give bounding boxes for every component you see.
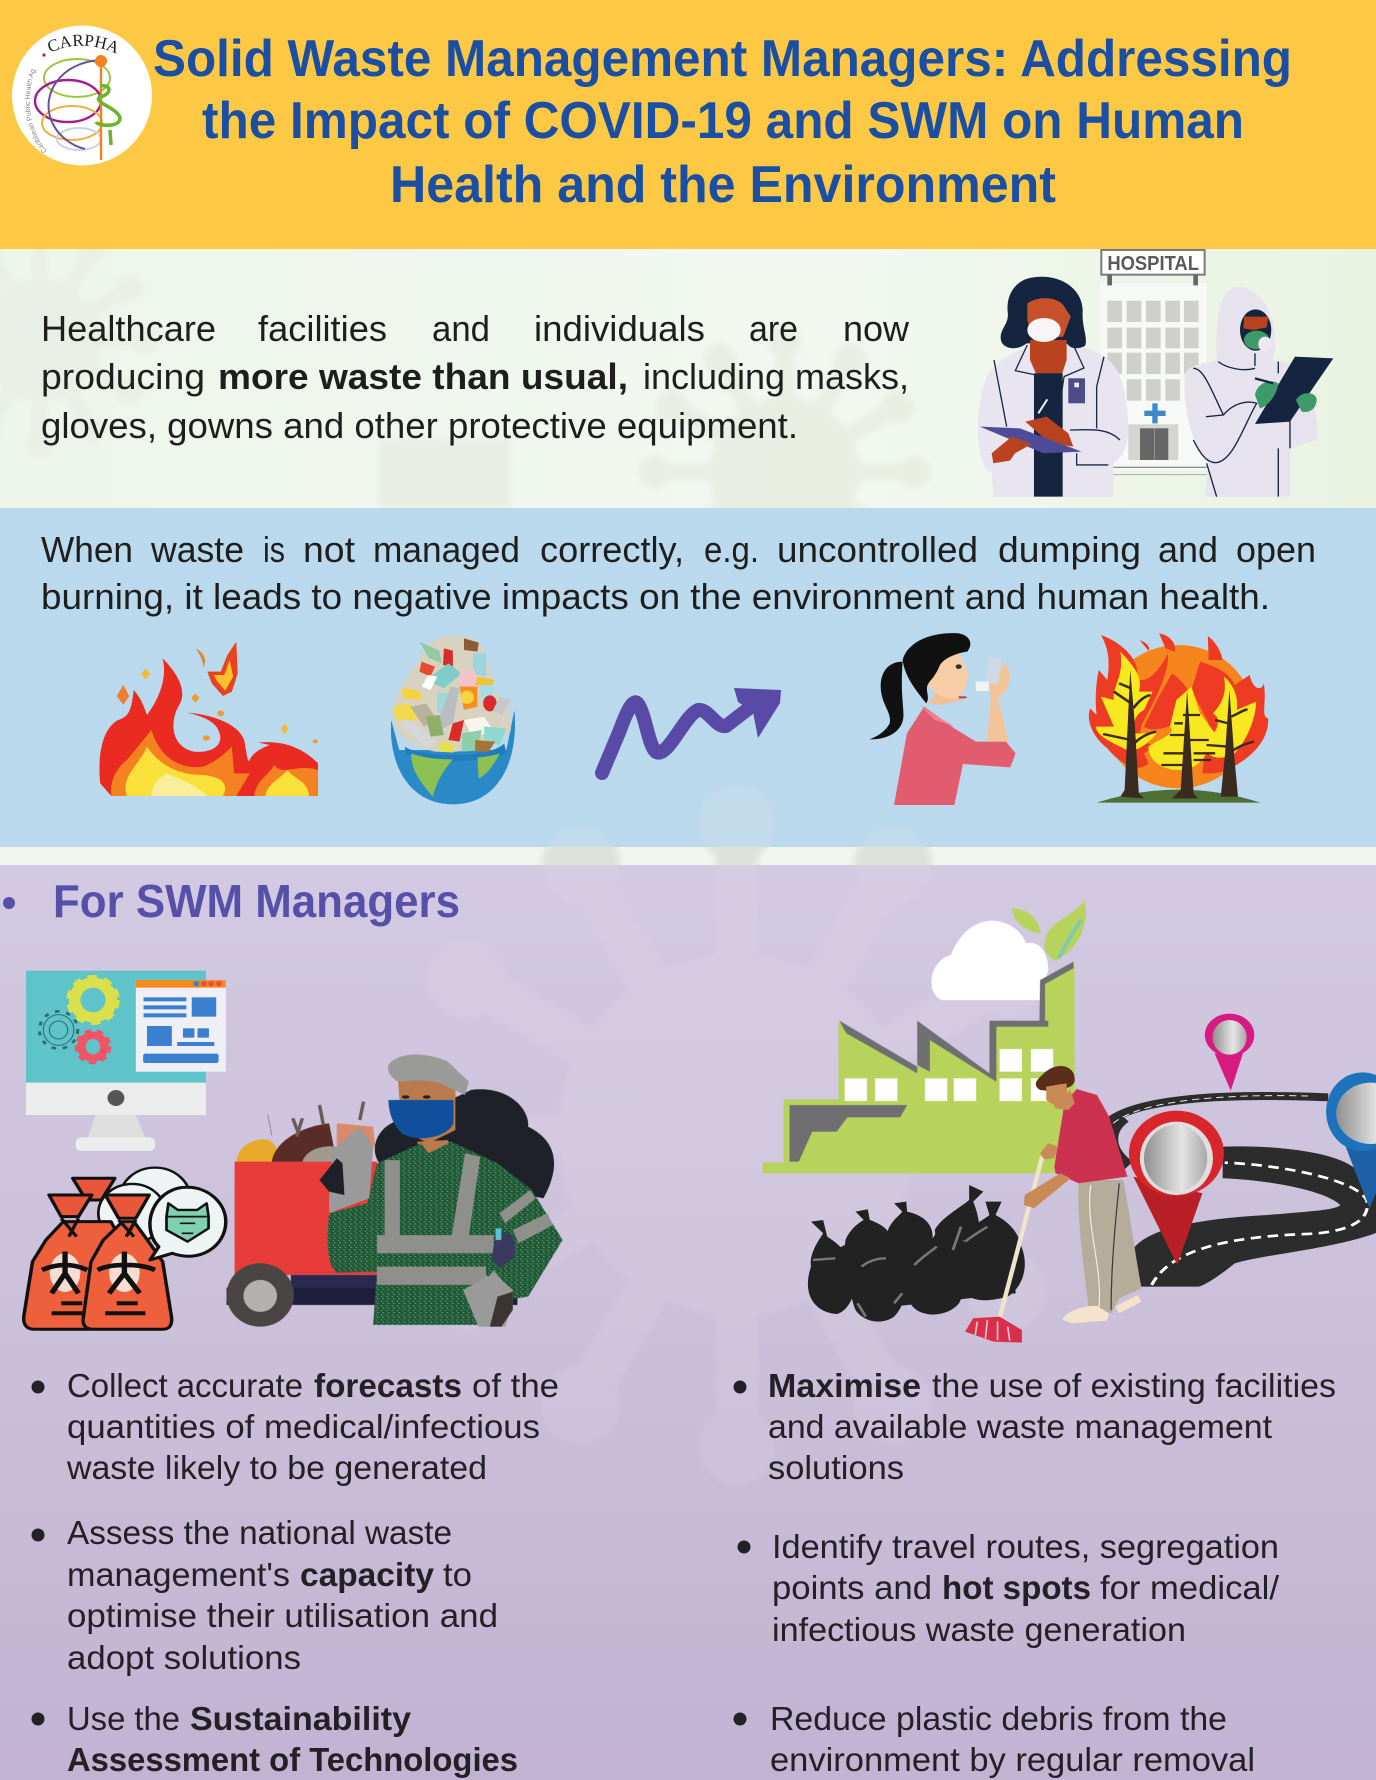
arrow: rising trend — [602, 688, 781, 773]
text: impacts paragraph: managed — [373, 529, 520, 570]
text: right action list: solutions — [768, 1449, 904, 1486]
doctor — [978, 277, 1128, 497]
text: left action list: capacity — [300, 1556, 435, 1593]
hospital building — [1100, 250, 1207, 475]
text: right action list: for medical/ — [1100, 1569, 1280, 1606]
text: left action list: adopt solutions — [67, 1639, 301, 1676]
text: impacts paragraph: open — [1236, 529, 1316, 570]
text: right action list: points and — [772, 1569, 932, 1606]
title: Solid Waste Management Managers: Addressing — [153, 30, 1292, 88]
text: intro paragraph: individuals — [534, 308, 705, 349]
panel: healthcare waste intro — [0, 249, 1376, 508]
icon: open burning flames — [99, 642, 318, 796]
icon: computer monitor with gears and dashboard — [26, 971, 226, 1151]
text: impacts paragraph: and — [1158, 529, 1218, 570]
text: left action list: forecasts — [314, 1367, 462, 1404]
text: impacts paragraph — [41, 529, 1316, 617]
icon: sweeper with black garbage bags — [808, 1066, 1142, 1343]
text: intro paragraph: facilities — [258, 308, 387, 349]
text: left action list: Sustainability — [190, 1700, 412, 1737]
text: impacts paragraph: is — [263, 529, 285, 570]
protective-suit worker — [1184, 287, 1333, 497]
text: intro paragraph: and — [432, 308, 490, 349]
icon: person using inhaler — [869, 633, 1016, 805]
text: impacts paragraph: dumping — [998, 529, 1141, 570]
heading: for SWM managers: For SWM Managers — [53, 875, 460, 927]
text: left action list: optimise their utilisation and — [67, 1597, 498, 1634]
text: intro paragraph: producing — [41, 356, 205, 397]
panel: impacts of poor waste management — [0, 508, 1376, 847]
text: intro paragraph: including masks, — [643, 356, 909, 397]
text: intro paragraph: more waste than usual, — [218, 356, 628, 397]
text: right action list: infectious waste generation — [772, 1611, 1186, 1648]
text: intro paragraph: now — [843, 308, 910, 349]
text: left action list: Assess the national waste — [67, 1514, 452, 1551]
pin: magenta — [1205, 1014, 1254, 1091]
text: right action list: Maximise — [768, 1367, 921, 1404]
icon: winding road with location pins — [1110, 1014, 1376, 1287]
sweeper — [965, 1066, 1142, 1343]
worker figure — [320, 1055, 563, 1327]
text: left action list — [32, 1367, 559, 1778]
panel: title banner — [0, 0, 1376, 249]
text: intro paragraph — [41, 308, 910, 446]
text: impacts paragraph: waste — [150, 529, 244, 570]
panel: pale divider band — [0, 847, 1376, 865]
icon: recycling factory with leaves and cloud — [762, 901, 1086, 1173]
text: impacts paragraph: uncontrolled — [777, 529, 978, 570]
icon: waste worker with collection cart — [227, 1055, 563, 1327]
garbage bags — [808, 1185, 1025, 1322]
text: impacts paragraph: When — [41, 529, 133, 570]
text: right action list: and available waste management — [768, 1408, 1272, 1445]
text: left action list: waste likely to be generated — [66, 1449, 487, 1486]
text: impacts paragraph: burning, it leads to negative impacts on the environment and human health. — [41, 576, 1270, 617]
text: right action list: Identify travel routes, segregation — [772, 1528, 1279, 1565]
cart with waste — [227, 1102, 517, 1327]
text: impacts paragraph: not — [303, 529, 355, 570]
text: left action list: to — [443, 1556, 472, 1593]
pin: red — [1129, 1111, 1224, 1265]
text: right action list: Reduce plastic debris from the — [770, 1700, 1227, 1737]
text: right action list: the use of existing facilities — [932, 1367, 1336, 1404]
text: left action list: Use the — [67, 1700, 180, 1737]
text: right action list: hot spots — [942, 1569, 1091, 1606]
text: left action list: of the — [472, 1367, 559, 1404]
text: right action list — [734, 1367, 1336, 1778]
text: left action list: Assessment of Technologies — [67, 1741, 518, 1778]
title: the Impact of COVID-19 and SWM on Human — [202, 92, 1244, 150]
icon: hospital with doctor and protective-suit worker — [978, 250, 1333, 497]
text: intro paragraph: Healthcare — [41, 308, 216, 349]
icon: biohazard waste bags with mask bubbles — [24, 1168, 226, 1329]
text: left action list: management's — [67, 1556, 290, 1593]
text: impacts paragraph: correctly, — [540, 529, 684, 570]
title: Health and the Environment — [390, 156, 1056, 214]
icon: earth bowl overflowing with waste — [391, 636, 515, 804]
panel: for SWM managers — [0, 784, 1376, 1780]
logo wordmark: CARPHA — [48, 34, 117, 54]
text: left action list: Collect accurate — [67, 1367, 303, 1404]
title — [153, 30, 1292, 214]
text: right action list: environment by regular removal — [770, 1741, 1255, 1778]
icon: burning forest — [1089, 633, 1268, 803]
icon: CARPHA logo — [12, 26, 152, 166]
text: intro paragraph: gloves, gowns and other protective equipment. — [41, 405, 798, 446]
text: intro paragraph: are — [749, 308, 798, 349]
hospital building: HOSPITAL — [1107, 252, 1199, 275]
text: left action list: quantities of medical/infectious — [67, 1408, 540, 1445]
pin: blue — [1326, 1072, 1376, 1208]
text: impacts paragraph: e.g. — [704, 529, 759, 570]
